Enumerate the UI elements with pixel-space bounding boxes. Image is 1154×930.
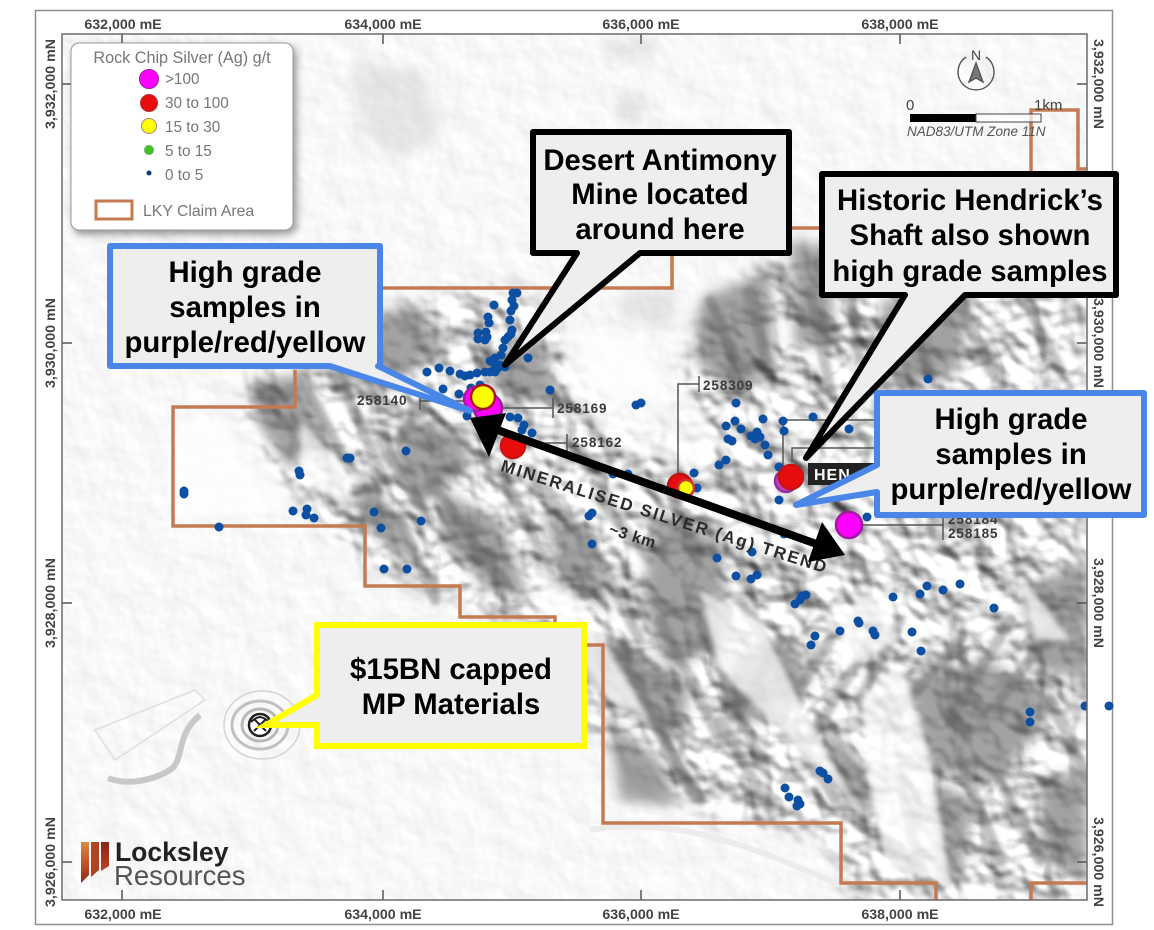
coordinate labels top: 638,000 mE	[861, 17, 939, 33]
scale bar: 1km	[1034, 97, 1062, 114]
callout: Desert Antimony Mine: Desert Antimony	[543, 144, 777, 177]
callout: Desert Antimony Mine	[505, 132, 789, 365]
legend items: 0 to 5	[165, 167, 203, 184]
callout: high grade samples (east): purple/red/yellow	[891, 473, 1132, 506]
Hendrick's label: HEN	[814, 467, 851, 484]
dark slopes	[250, 240, 1087, 880]
coordinate labels top: 636,000 mE	[602, 17, 680, 33]
coordinate labels right	[1090, 39, 1106, 907]
Locksley Resources logo	[81, 837, 245, 891]
callout: high grade samples (west)	[110, 246, 470, 411]
coordinate labels bottom: 632,000 mE	[84, 907, 162, 923]
coordinate labels bottom: 638,000 mE	[861, 907, 939, 923]
legend title: Rock Chip Silver (Ag) g/t	[93, 49, 271, 67]
coordinate labels left: 3,932,000 mN	[43, 39, 59, 129]
coordinate labels top: 632,000 mE	[84, 17, 162, 33]
callout: Historic Hendrick's Shaft: Historic Hendrick’s	[837, 184, 1103, 217]
callout: high grade samples (east): samples in	[935, 438, 1087, 471]
callout: MP Materials: MP Materials	[362, 688, 540, 721]
mine pick-axe icon	[249, 714, 271, 736]
coordinate labels left: 3,928,000 mN	[43, 558, 59, 648]
callout: MP Materials: $15BN capped	[350, 653, 552, 686]
callout: high grade samples (west): High grade	[168, 256, 322, 289]
legend items: 30 to 100	[165, 95, 229, 112]
trend label: ~3 km	[607, 521, 658, 552]
coordinate labels left: 3,926,000 mN	[43, 817, 59, 907]
coordinate labels bottom: 634,000 mE	[344, 907, 422, 923]
pale hills top	[350, 40, 680, 330]
scale bar: 0	[906, 97, 914, 114]
Locksley Resources logo: Locksley	[115, 837, 229, 867]
callout: Historic Hendrick's Shaft: high grade samples	[832, 255, 1108, 288]
sample labels with leader lines: 258169	[557, 401, 607, 416]
coordinate labels left	[43, 39, 59, 907]
double-headed trend arrow	[470, 413, 845, 562]
scale bar: NAD83/UTM Zone 11N	[907, 124, 1046, 139]
callout: MP Materials	[266, 625, 584, 746]
Locksley Resources logo: Resources	[114, 860, 245, 891]
callout: Desert Antimony Mine: Mine located	[571, 178, 749, 211]
Hendrick's label	[808, 463, 878, 485]
light ridges	[175, 330, 1070, 880]
open-pit mine and tailings	[95, 690, 840, 885]
gully streaks	[300, 290, 1087, 870]
callout: high grade samples (east)	[796, 393, 1144, 515]
north arrow	[958, 47, 994, 90]
legend items: 5 to 15	[165, 143, 212, 160]
callout: Desert Antimony Mine: around here	[575, 213, 745, 246]
legend items: >100	[165, 71, 199, 88]
legend items	[96, 70, 254, 220]
coordinate labels right: 3,928,000 mN	[1090, 558, 1106, 648]
coordinate labels right: 3,926,000 mN	[1090, 817, 1106, 907]
rock chip samples 0 to 5	[180, 288, 1090, 810]
coordinate labels bottom	[84, 907, 939, 923]
legend items: 15 to 30	[165, 119, 220, 136]
sample labels with leader lines: 258162	[572, 435, 622, 450]
callout: high grade samples (east): High grade	[934, 403, 1088, 436]
sample labels with leader lines: 258309	[703, 378, 753, 393]
coordinate labels top: 634,000 mE	[344, 17, 422, 33]
callout: Historic Hendrick's Shaft: Shaft also shown	[850, 219, 1090, 252]
callout: high grade samples (west): samples in	[169, 291, 321, 324]
legend panel	[71, 43, 293, 230]
north arrow: N	[971, 47, 981, 63]
coordinate labels right: 3,930,000 mN	[1090, 298, 1106, 388]
trend label: MINERALISED SILVER (Ag) TREND	[499, 456, 831, 577]
sample labels with leader lines: 258184	[948, 512, 998, 527]
outside-map sample dot	[1104, 702, 1114, 710]
high grade markers	[464, 385, 862, 538]
coordinate labels right: 3,932,000 mN	[1090, 39, 1106, 129]
LKY claim boundary	[173, 110, 1087, 900]
sample labels with leader lines: 258185	[948, 526, 998, 541]
callout: Historic Hendrick's Shaft	[806, 174, 1116, 458]
scale bar	[906, 97, 1062, 139]
coordinate labels bottom: 636,000 mE	[602, 907, 680, 923]
callout: high grade samples (west): purple/red/yellow	[125, 326, 366, 359]
sample labels with leader lines	[357, 376, 998, 541]
coordinate labels top	[84, 17, 939, 33]
coordinate labels left: 3,930,000 mN	[43, 298, 59, 388]
sample labels with leader lines: 258140	[357, 393, 407, 408]
legend items: LKY Claim Area	[143, 203, 254, 220]
